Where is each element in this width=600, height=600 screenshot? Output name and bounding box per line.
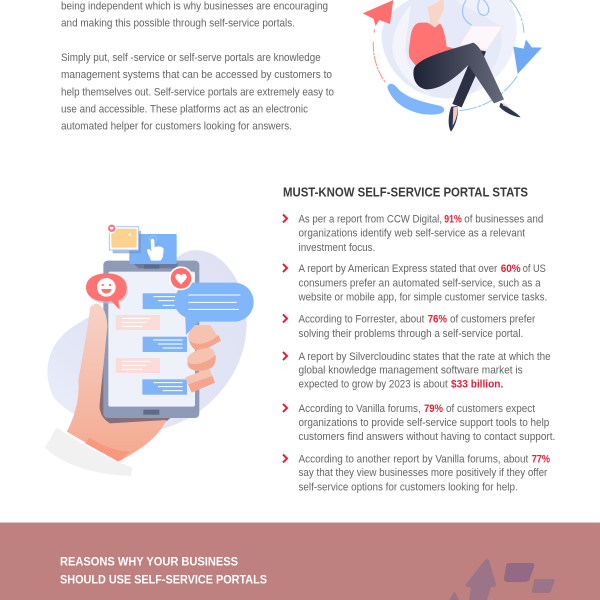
- paper plane: blue: [513, 39, 542, 74]
- reasons heading: REASONS WHY YOUR BUSINESS: [60, 554, 238, 568]
- stat 1: [283, 214, 543, 254]
- arrows and tiles graphic: [449, 559, 555, 600]
- stat 3: solving their problems through a self-service portal.: [298, 328, 523, 340]
- stat 2: [283, 263, 547, 304]
- stat 4: [283, 351, 551, 390]
- stat 6: 77%: [532, 454, 550, 466]
- intro text block: and making this possible through self-service portals.: [61, 18, 295, 30]
- intro text block: management systems that can be accessed by customers to: [61, 69, 332, 81]
- stat 3: 76%: [428, 314, 447, 326]
- stat 3: According to Forrester, about: [298, 314, 424, 326]
- stat 4: $33 billion.: [451, 378, 503, 390]
- dashed orbit: red: [373, 29, 386, 83]
- hand: [67, 304, 167, 462]
- stat 2: website or mobile app, for simple customer service tasks.: [298, 292, 547, 304]
- stat 1: investment focus.: [298, 242, 375, 254]
- intro text block: [61, 0, 334, 133]
- stat 6: According to another report by Vanilla forums, about: [298, 454, 528, 466]
- tap card: [129, 234, 179, 269]
- stat 2: 60%: [501, 263, 521, 275]
- stat 5: 79%: [424, 403, 443, 415]
- wrist shade: [85, 437, 130, 462]
- intro text block: help themselves out. Self-service portals are extremely easy to: [61, 86, 334, 98]
- heart badge: [169, 266, 193, 290]
- reasons heading: [60, 554, 267, 586]
- illustration: hand holding phone: [45, 223, 254, 476]
- message bubble: [174, 283, 254, 335]
- stat 6: self-service options for customers looking for help.: [298, 482, 518, 494]
- woman figure: [409, 0, 521, 132]
- stat 1: organizations identify web self-service as a relevant: [298, 228, 525, 240]
- stat 5: customers find answers without having to contact support.: [298, 431, 555, 443]
- stat 2: A report by American Express stated that over: [298, 263, 498, 275]
- stat 5: [283, 403, 555, 443]
- stat 4: global knowledge management software market is: [298, 364, 523, 376]
- stats list: [283, 214, 555, 493]
- stat 3: [283, 314, 536, 340]
- intro text block: automated helper for customers looking for answers.: [61, 121, 292, 133]
- illustration: woman with laptop and paper planes: [363, 0, 542, 132]
- squiggle line: [463, 0, 489, 25]
- stat 1: of businesses and: [464, 214, 543, 226]
- stat 2: of US: [523, 263, 546, 275]
- paper plane: red: [363, 0, 393, 26]
- intro text block: use and accessible. These platforms act as an electronic: [61, 103, 309, 115]
- intro text block: Simply put, self -service or self-serve portals are knowledge: [61, 52, 321, 64]
- smile bubble: [86, 273, 128, 310]
- stats heading: MUST-KNOW SELF-SERVICE PORTAL STATS: [283, 186, 528, 200]
- fingers: [185, 325, 221, 393]
- intro text block: being independent which is why businesses are encouraging: [61, 0, 328, 12]
- stat 6: [283, 454, 550, 494]
- photo card: [107, 223, 141, 253]
- stat 1: 91%: [444, 214, 462, 226]
- phone shadow: [99, 300, 170, 425]
- sleeve cuff: [45, 427, 132, 476]
- stat 2: consumers prefer an automated self-service, such as a: [298, 277, 541, 289]
- chat messages: [116, 293, 187, 395]
- stat 1: As per a report from CCW Digital,: [298, 214, 442, 226]
- blue swoosh: [387, 84, 444, 115]
- background blob: [47, 250, 247, 431]
- phone: [103, 261, 199, 418]
- dashed orbit: blue: [459, 0, 524, 111]
- reasons heading: SHOULD USE SELF-SERVICE PORTALS: [60, 572, 267, 586]
- stat 4: expected to grow by 2023 is about: [298, 378, 448, 390]
- stat 5: organizations to provide self-service support tools to help: [298, 417, 549, 429]
- stat 4: A report by Silvercloudinc states that the rate at which the: [298, 351, 551, 363]
- stat 3: of customers prefer: [450, 314, 536, 326]
- stat 5: According to Vanilla forums,: [298, 403, 421, 415]
- stat 6: say that they view businesses more positively if they offer: [298, 467, 548, 479]
- stat 5: of customers expect: [446, 403, 535, 415]
- reasons panel: [0, 522, 600, 600]
